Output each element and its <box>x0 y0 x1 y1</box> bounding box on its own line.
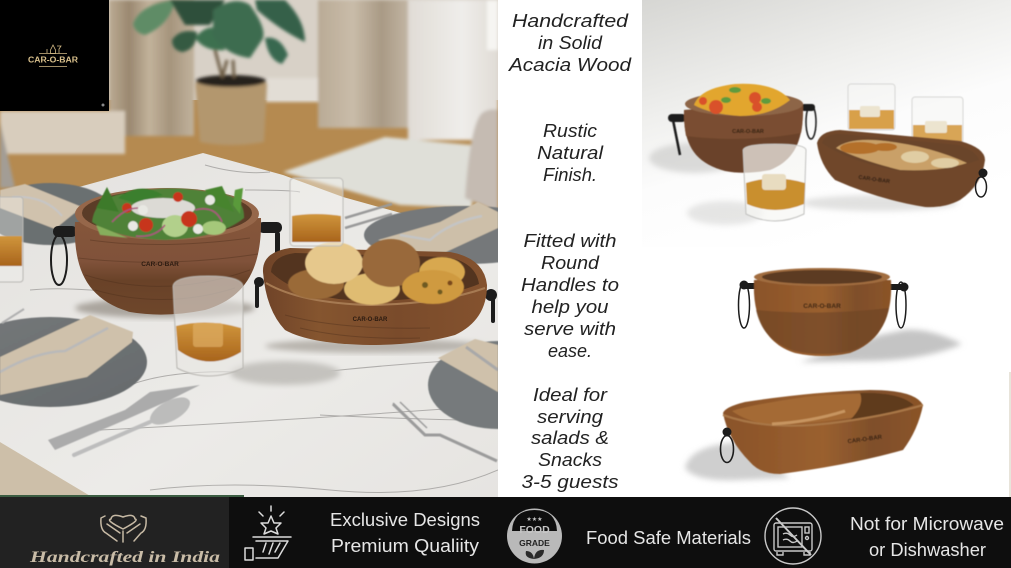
text: handcrafted in solid acacia wood: Acacia Wood <box>508 55 632 75</box>
whisky glass, left edge <box>0 197 23 282</box>
plate with napkin, top right <box>344 202 498 264</box>
text: food safe materials: Food Safe Materials <box>586 528 751 548</box>
icon: food grade badge: FOOD <box>519 524 550 536</box>
icon: food grade badge <box>507 508 562 564</box>
text: ideal for serving: Ideal for <box>533 385 608 405</box>
text: rustic natural finish <box>537 121 604 185</box>
oval dish logo: CAR-O-BAR <box>847 435 883 445</box>
text: round handles: Handles to <box>521 275 619 295</box>
bread dish logo: CAR-O-BAR <box>353 317 388 323</box>
text: rustic natural finish: Natural <box>537 143 604 163</box>
text: round handles: serve with <box>524 319 616 339</box>
bowl left ring <box>738 280 756 328</box>
text: round handles: ease. <box>548 341 592 361</box>
panel: product photo with snacks <box>642 0 1011 247</box>
text: not for microwave or dishwasher: Not for Microwave <box>850 514 1004 534</box>
bread dish <box>254 239 497 353</box>
icon: food grade badge: ★★★ <box>526 516 543 523</box>
bowl right ring <box>889 282 908 328</box>
text: exclusive designs premium quality <box>330 510 480 556</box>
snack bowl left handle <box>668 114 686 155</box>
text: exclusive designs premium quality: Exclusive Designs <box>330 510 480 530</box>
round bowl logo: CAR-O-BAR <box>803 303 841 310</box>
icon: hands holding heart <box>101 515 146 542</box>
dish shadow <box>685 442 790 480</box>
text: ideal for serving: 3-5 guests <box>522 472 618 492</box>
text: exclusive designs premium quality: Premium Qualiity <box>331 536 479 556</box>
tumbler with whisky, front <box>173 276 243 376</box>
soft table shadows <box>649 143 958 225</box>
text: ideal for serving <box>522 385 618 492</box>
oval wooden dish <box>723 390 923 474</box>
whisky glass, back <box>290 178 343 246</box>
nuts and pretzels dish <box>817 130 985 207</box>
plate with napkin, bottom right <box>427 338 498 430</box>
dish ring handle <box>976 168 988 197</box>
back wall <box>109 0 498 100</box>
dish logo: CAR-O-BAR <box>858 175 890 185</box>
text: ideal for serving: serving <box>537 407 603 427</box>
snacks <box>694 84 790 116</box>
fork bottom right <box>393 402 497 461</box>
knife and spoon <box>48 385 200 455</box>
curtains, rug and chairs <box>0 0 498 212</box>
text: round handles: help you <box>532 297 608 317</box>
text: round handles <box>521 231 619 361</box>
icon: food grade badge: GRADE <box>519 538 550 548</box>
wooden floor <box>0 100 498 220</box>
icon: star on serving tray <box>245 506 291 560</box>
dish ring handle <box>720 428 734 462</box>
panel: bottom feature bar <box>0 495 1011 568</box>
right dish handle <box>485 289 497 323</box>
salad <box>92 186 244 240</box>
text: rustic natural finish: Finish. <box>543 165 597 185</box>
logo wordmark: CAR-O-BAR <box>28 56 78 64</box>
right ring handle <box>260 222 282 252</box>
text: ideal for serving: salads & <box>531 428 609 448</box>
text: handcrafted in solid acacia wood: Handcrafted <box>512 11 629 31</box>
snack bowl right handle <box>801 104 816 139</box>
salad bowl <box>51 186 282 318</box>
panel: product photo, oval dish <box>642 372 1011 497</box>
panel: product photo, round bowl <box>642 247 1011 372</box>
text: rustic natural finish: Rustic <box>543 121 597 141</box>
logo panel <box>0 0 109 111</box>
text: handcrafted in solid acacia wood <box>508 11 632 75</box>
panel: feature text column <box>498 0 642 497</box>
plate with napkin and fork, bottom left <box>0 309 147 407</box>
text: round handles: Round <box>541 253 600 273</box>
logo icon: bar tools <box>39 45 67 66</box>
soft table shadow right of the tumbler <box>230 361 340 385</box>
text: round handles: Fitted with <box>524 231 616 251</box>
tumbler, front <box>743 144 806 221</box>
plate with napkin, top left <box>0 183 115 245</box>
marble table top <box>0 153 498 497</box>
text: ideal for serving: Snacks <box>538 450 602 470</box>
left dish handle <box>254 277 264 308</box>
marble veining <box>30 165 498 492</box>
plant in woven basket <box>133 0 305 145</box>
left ring handle <box>51 226 77 285</box>
snack bowl <box>668 84 816 173</box>
back tumblers <box>848 84 963 143</box>
salad bowl logo: CAR-O-BAR <box>141 261 179 268</box>
panel: lifestyle photo of table setting <box>0 0 498 497</box>
snack bowl logo: CAR-O-BAR <box>732 129 764 135</box>
round wooden bowl <box>754 268 891 356</box>
bowl shadow <box>800 330 962 362</box>
bread rolls <box>288 239 465 305</box>
text: handcrafted in india: Handcrafted in India <box>29 549 220 566</box>
floor corner bottom left <box>0 442 92 497</box>
badge: handcrafted in india <box>0 497 229 568</box>
text: handcrafted in solid acacia wood: in Solid <box>538 33 603 53</box>
icon: no microwave <box>765 508 821 564</box>
text: not for microwave or dishwasher <box>850 514 1004 560</box>
text: not for microwave or dishwasher: or Dishwasher <box>869 540 986 560</box>
